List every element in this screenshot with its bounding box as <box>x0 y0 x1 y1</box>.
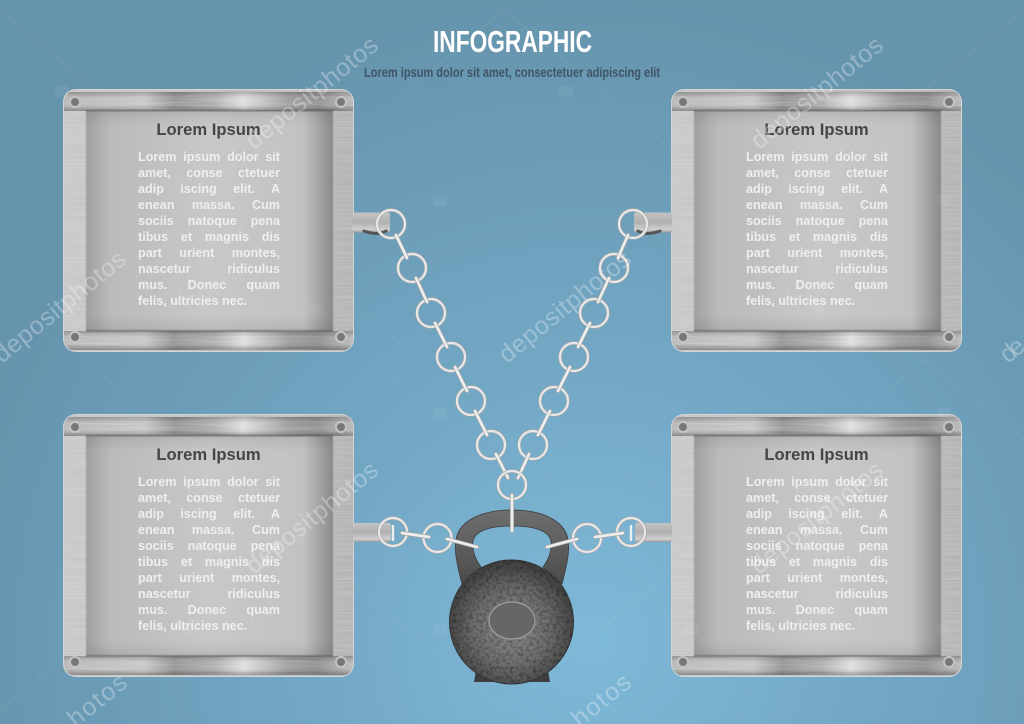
text block: Lorem ipsum dolor sit <box>746 150 888 164</box>
text block: nascetur ridiculus <box>138 262 280 276</box>
panel: top right <box>671 89 962 352</box>
chain: top left <box>352 210 508 478</box>
chain: bottom right <box>547 518 672 552</box>
watermarks: depositphotos <box>745 31 889 155</box>
text block: nascetur ridiculus <box>746 587 888 601</box>
text block: enean massa. Cum <box>746 523 888 537</box>
text block: sociis natoque pena <box>746 214 888 228</box>
text block: mus. Donec quam <box>138 603 280 617</box>
panel: bottom right <box>671 414 962 677</box>
text block: adip iscing elit. A <box>746 182 888 196</box>
text block: part urient montes, <box>138 246 280 260</box>
text block: mus. Donec quam <box>138 278 280 292</box>
text block <box>138 150 280 308</box>
text block: Lorem ipsum dolor sit <box>138 150 280 164</box>
text block: sociis natoque pena <box>138 539 280 553</box>
text block: adip iscing elit. A <box>746 507 888 521</box>
text block: felis, ultricies nec. <box>138 619 247 633</box>
text block: part urient montes, <box>746 571 888 585</box>
text block: enean massa. Cum <box>138 523 280 537</box>
text block: tibus et magnis dis <box>138 230 280 244</box>
text block: adip iscing elit. A <box>138 507 280 521</box>
text block: sociis natoque pena <box>746 539 888 553</box>
heading: Lorem Ipsum <box>156 120 261 139</box>
text block: mus. Donec quam <box>746 278 888 292</box>
watermarks: depositphotos <box>240 456 384 580</box>
text block: amet, conse ctetuer <box>138 166 280 180</box>
text block: enean massa. Cum <box>138 198 280 212</box>
chain: top right <box>518 210 672 478</box>
watermarks: depositphotos <box>493 245 637 369</box>
heading: Lorem Ipsum <box>156 445 261 464</box>
text block: part urient montes, <box>138 571 280 585</box>
text block: adip iscing elit. A <box>138 182 280 196</box>
text block: amet, conse ctetuer <box>746 166 888 180</box>
watermarks: depositphotos <box>745 456 889 580</box>
heading: Lorem Ipsum <box>764 120 869 139</box>
text block <box>746 475 888 633</box>
text block: felis, ultricies nec. <box>138 294 247 308</box>
text block <box>746 150 888 308</box>
text block: amet, conse ctetuer <box>138 491 280 505</box>
text block: felis, ultricies nec. <box>746 619 855 633</box>
text block <box>138 475 280 633</box>
text block: part urient montes, <box>746 246 888 260</box>
title: INFOGRAPHIC <box>433 24 592 59</box>
watermark camera icons <box>55 86 951 635</box>
text block: mus. Donec quam <box>746 603 888 617</box>
text block: Lorem ipsum dolor sit <box>746 475 888 489</box>
text block: Lorem ipsum dolor sit <box>138 475 280 489</box>
text block: felis, ultricies nec. <box>746 294 855 308</box>
heading: Lorem Ipsum <box>764 445 869 464</box>
text block: nascetur ridiculus <box>138 587 280 601</box>
text block: tibus et magnis dis <box>138 555 280 569</box>
panel: bottom left <box>63 414 354 677</box>
text block: nascetur ridiculus <box>746 262 888 276</box>
panel: top left <box>63 89 354 352</box>
text block: sociis natoque pena <box>138 214 280 228</box>
watermarks: depositphotos <box>240 31 384 155</box>
text block: amet, conse ctetuer <box>746 491 888 505</box>
kettlebell <box>449 510 575 685</box>
text block: tibus et magnis dis <box>746 555 888 569</box>
text block: tibus et magnis dis <box>746 230 888 244</box>
chain: center link <box>498 471 526 531</box>
chain: bottom left <box>353 518 477 552</box>
text block: enean massa. Cum <box>746 198 888 212</box>
